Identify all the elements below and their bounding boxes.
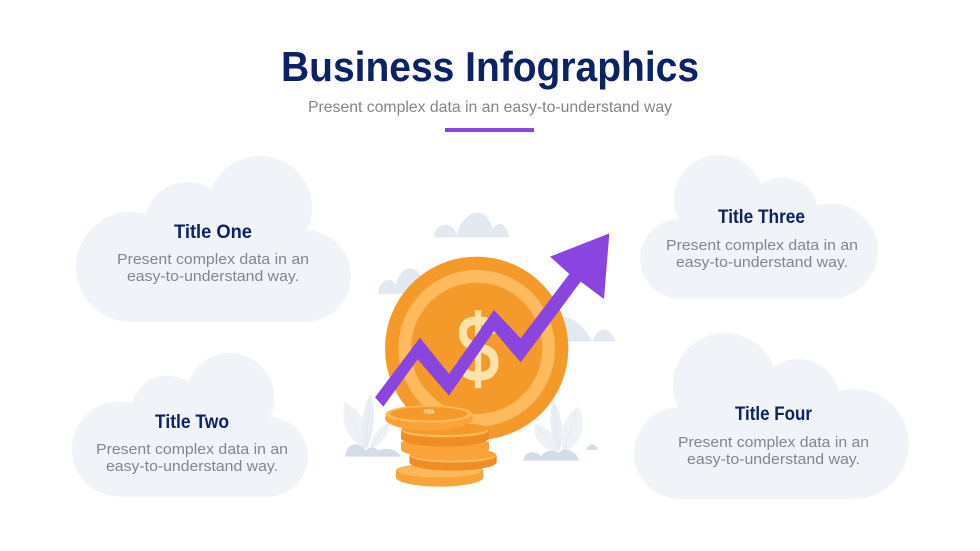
- text: description two: easy-to-understand way.: [106, 458, 278, 475]
- heading: Title Two: Title Two: [155, 412, 229, 433]
- icon: background cloud top: [433, 213, 509, 237]
- icon: rising purple arrow: [375, 233, 609, 407]
- cloud shape four: [634, 333, 909, 499]
- second coin: [401, 423, 489, 447]
- title: Business Infographics: [281, 43, 699, 90]
- text: description four: Present complex data in an: [678, 434, 869, 451]
- central illustration: coins and rising arrow: [343, 213, 615, 487]
- icon: right leaves: [523, 400, 598, 461]
- icon: coin stack: [385, 405, 497, 487]
- icon: background cloud left: [378, 268, 427, 294]
- accent underline: [445, 128, 534, 132]
- text: description one: easy-to-understand way.: [127, 268, 299, 285]
- fourth coin: [409, 449, 497, 471]
- heading: Title Four: Title Four: [735, 404, 813, 425]
- dollar sign: $: [456, 297, 499, 401]
- text: description three: Present complex data in an: [666, 237, 858, 254]
- icon: background cloud right: [560, 317, 615, 342]
- panel: cloud three: [640, 155, 878, 299]
- subtitle: Present complex data in an easy-to-understand way: [308, 99, 672, 116]
- cloud shape three: [640, 155, 878, 299]
- heading: Title Three: Title Three: [718, 207, 805, 228]
- small coin dollar mark: $: [423, 409, 435, 415]
- text: description three: easy-to-understand way.: [676, 254, 848, 271]
- text: description four: easy-to-understand way.: [687, 451, 860, 468]
- panel: cloud two: [72, 353, 308, 497]
- icon: left leaves: [343, 393, 401, 457]
- panel: cloud four: [634, 333, 909, 499]
- text: description two: Present complex data in an: [96, 441, 288, 458]
- third coin: [401, 442, 489, 457]
- text: description one: Present complex data in an: [117, 251, 309, 268]
- cloud shape two: [72, 353, 308, 497]
- top coin: [385, 406, 473, 431]
- heading: Title One: Title One: [174, 222, 252, 243]
- panel: cloud one: [76, 156, 351, 322]
- bottom coin: [396, 463, 483, 487]
- cloud shape one: [76, 156, 351, 322]
- icon: large dollar coin: [385, 257, 568, 440]
